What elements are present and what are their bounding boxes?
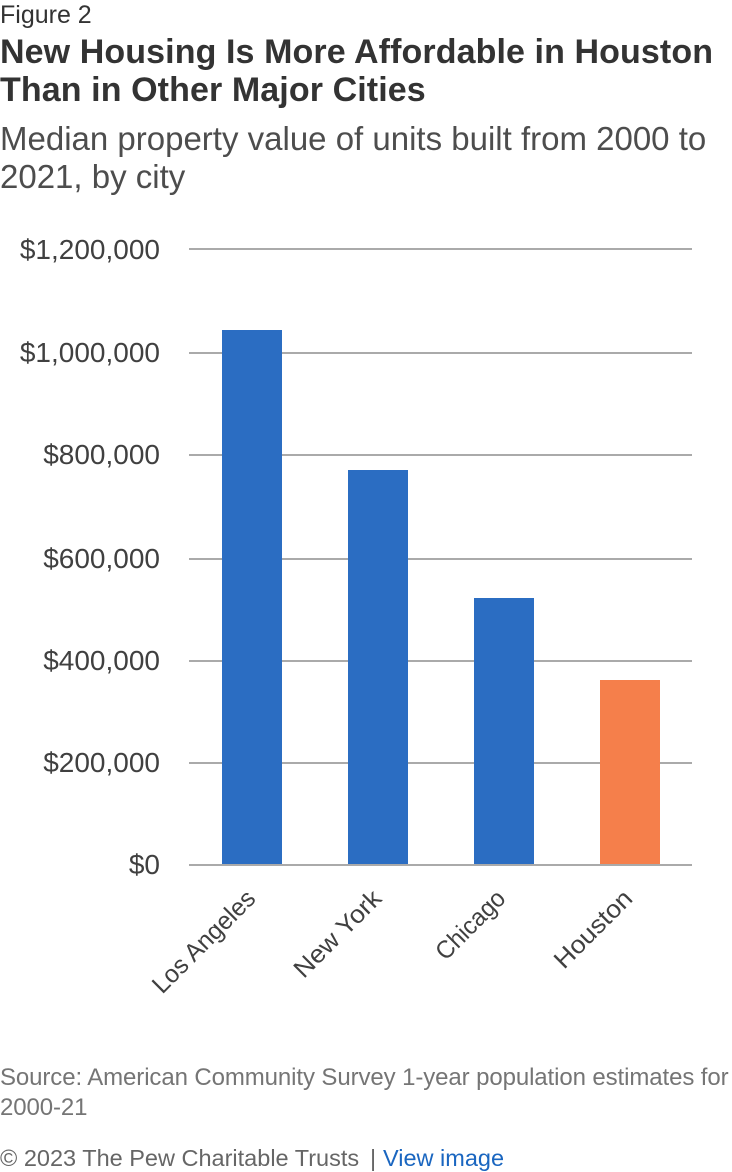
x axis labels: Houston [548,884,638,974]
x axis labels: Los Angeles [147,884,261,999]
x axis labels: New York [288,884,388,983]
y axis labels: $200,000 [43,747,160,778]
source note: Source: American Community Survey 1-year population estimates for [0,1064,728,1091]
y axis labels: $600,000 [43,543,160,574]
bar: Los Angeles [222,330,282,864]
subtitle [0,120,706,195]
x axis labels [147,884,638,999]
y axis labels: $0 [129,849,160,880]
subtitle: 2021, by city [0,158,185,195]
subtitle: Median property value of units built from 2000 to [0,120,706,157]
y axis labels: $800,000 [43,439,160,470]
copyright line: © 2023 The Pew Charitable Trusts [0,1145,359,1171]
y axis labels: $1,200,000 [20,234,160,265]
figure label: Figure 2 [0,1,92,29]
bar: Chicago [474,598,534,864]
title [0,33,713,109]
title: Than in Other Major Cities [0,71,426,109]
bar: New York [348,470,408,864]
x axis labels: Chicago [430,884,511,966]
source note: 2000-21 [0,1094,87,1121]
y axis labels: $400,000 [43,645,160,676]
bar: Houston [600,680,660,864]
y axis labels: $1,000,000 [20,337,160,368]
y axis labels [20,234,160,880]
copyright line: View image [383,1145,504,1171]
title: New Housing Is More Affordable in Houston [0,33,713,71]
source note [0,1064,728,1121]
copyright line: | [370,1145,376,1171]
